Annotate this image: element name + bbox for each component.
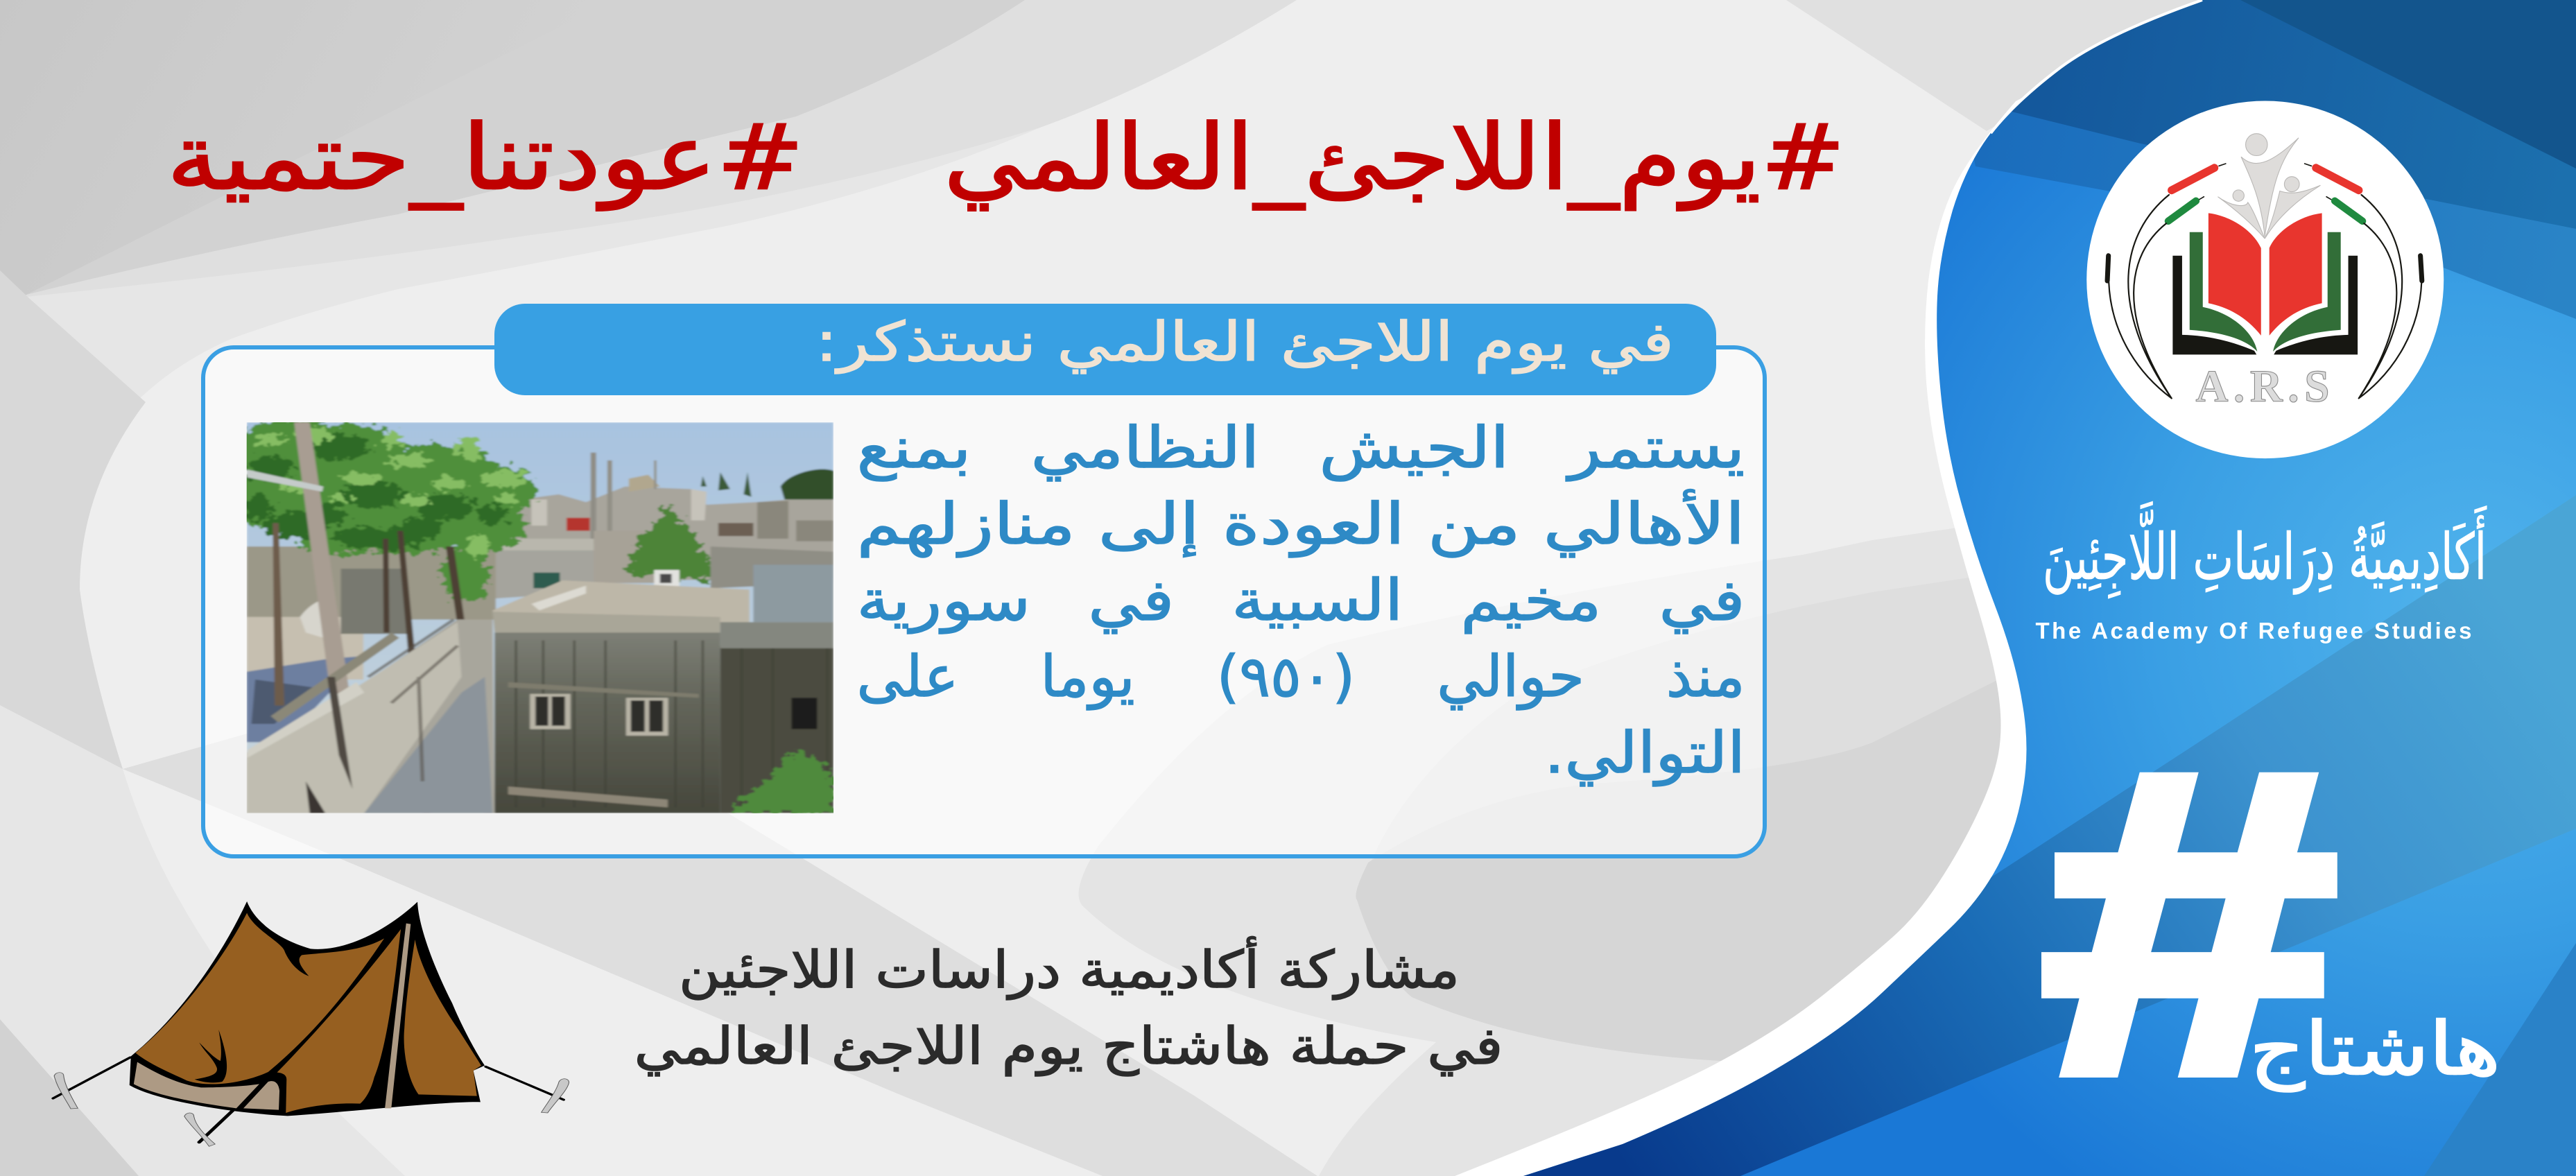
tent pole and floor — [134, 924, 410, 1110]
panel heading pill — [494, 304, 1716, 395]
title: world refugee day hashtag: #يوم_اللاجئ_العالمي — [944, 105, 1845, 211]
distant buildings — [492, 487, 833, 583]
ground and background at left — [247, 546, 496, 619]
tent silhouette — [130, 901, 485, 1116]
icon: tent — [51, 901, 569, 1147]
body text: منذ حوالي (٩٥٠) يوما على — [857, 644, 1745, 710]
body text: الأهالي من العودة إلى منازلهم — [857, 490, 1745, 558]
tent stakes — [54, 1073, 569, 1146]
icon: book red pages — [2208, 213, 2322, 336]
icon: book green pages — [2190, 232, 2341, 352]
icon: book black covers — [2172, 256, 2358, 354]
icon: three figures — [2218, 134, 2320, 239]
logo initials: A.R.S — [2195, 361, 2335, 412]
big hash symbol: # — [2042, 684, 2336, 1160]
tent ropes — [53, 1057, 564, 1142]
blue panel background with facets — [1456, 0, 2576, 1176]
panel: main message — [203, 304, 1765, 856]
panel heading text: في يوم اللاجئ العالمي نستذكر: — [815, 311, 1674, 374]
body text: في مخيم السبية في سورية — [857, 568, 1745, 634]
title: our return is inevitable hashtag: #عودتنا_حتمية — [166, 105, 804, 211]
building walls and windows — [494, 632, 720, 813]
photo: refugee camp rooftops — [247, 422, 833, 813]
logotype: academy name in English: The Academy Of Refugee Studies — [2036, 618, 2471, 643]
credit text: first line: مشاركة أكاديمية دراسات اللاجئين — [679, 936, 1460, 1000]
body text: التوالي. — [1544, 720, 1745, 786]
white curved band — [1455, 0, 2576, 1176]
credit text: second line: في حملة هاشتاج يوم اللاجئ العالمي — [634, 1017, 1503, 1076]
green vine canopy — [228, 419, 535, 604]
concrete fence — [368, 619, 496, 813]
poles — [294, 422, 352, 714]
body text: يستمر الجيش النظامي بمنع — [857, 415, 1745, 481]
tent canvas — [135, 913, 481, 1113]
logo: white circle with A.R.S emblem — [2086, 101, 2444, 459]
hashtag word: هاشتاج — [2249, 1007, 2500, 1092]
concrete roof — [492, 580, 750, 625]
icon: reeds — [2107, 164, 2422, 398]
body text — [857, 415, 1745, 786]
